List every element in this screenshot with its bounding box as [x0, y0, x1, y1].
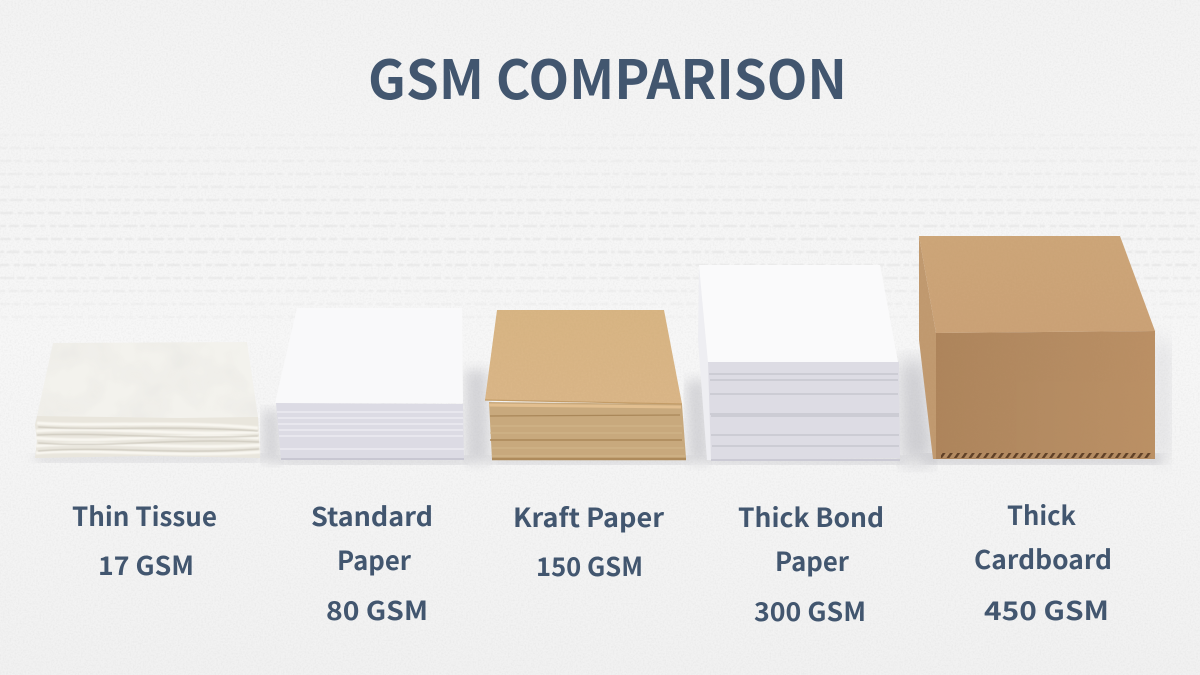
label: thick bond paper: [738, 498, 884, 629]
label: thick cardboard: Cardboard: [974, 540, 1112, 577]
cardboard front: [936, 331, 1155, 459]
cardboard top: [919, 236, 1155, 333]
label: thin tissue: Thin Tissue: [72, 497, 217, 534]
label: kraft paper: [513, 498, 665, 584]
tissue layers: [35, 416, 260, 458]
cardboard left side: [919, 236, 936, 459]
faint ghost text lines on background: [0, 135, 1200, 317]
bond top: [699, 265, 898, 362]
label: kraft paper: Kraft Paper: [513, 498, 665, 535]
label: thick bond paper: Thick Bond: [738, 498, 884, 535]
kraft edges: [489, 402, 686, 460]
label: thin tissue: 17 GSM: [98, 546, 194, 583]
label: thick cardboard: 450 GSM: [984, 591, 1109, 628]
tissue stack: [30, 335, 265, 458]
label: thin tissue: [72, 497, 217, 583]
label: thick bond paper: 300 GSM: [754, 592, 866, 629]
thick cardboard block: [915, 232, 1160, 464]
standard paper edges: [276, 403, 464, 460]
cardboard grain: [915, 232, 1160, 464]
label: thick cardboard: [974, 496, 1112, 628]
thick bond paper stack: [698, 265, 900, 460]
label: standard paper: [311, 497, 433, 628]
bond edges: [708, 362, 900, 460]
title: GSM COMPARISON: [368, 36, 847, 115]
label: thick cardboard: Thick: [1007, 496, 1076, 533]
standard paper top: [275, 308, 463, 403]
standard paper stack: [275, 308, 464, 460]
kraft top sheet: [485, 310, 682, 404]
bond left side: [698, 265, 712, 460]
tissue top sheet: [38, 342, 258, 418]
soft shadows under stacks: [36, 335, 1170, 464]
label: kraft paper: 150 GSM: [536, 547, 643, 584]
label: standard paper: Standard: [311, 497, 433, 534]
label: standard paper: 80 GSM: [326, 591, 428, 628]
label: standard paper: Paper: [337, 541, 412, 578]
corrugated edge: [941, 453, 1151, 458]
label: thick bond paper: Paper: [775, 542, 850, 579]
kraft paper stack: [480, 305, 686, 460]
